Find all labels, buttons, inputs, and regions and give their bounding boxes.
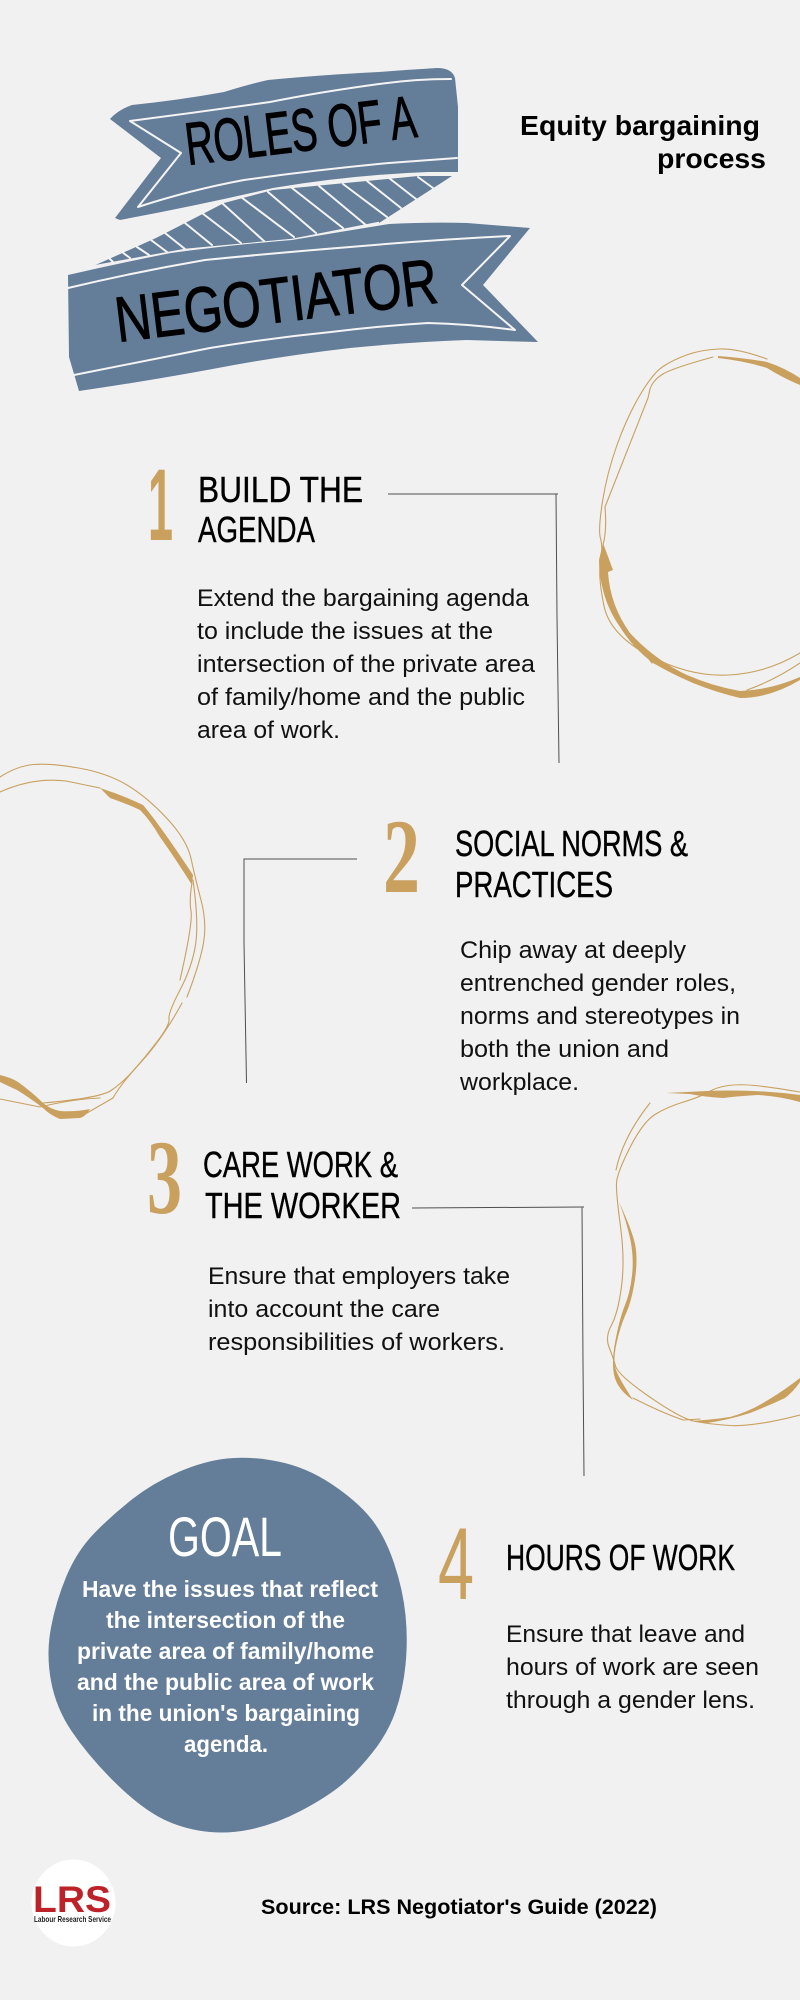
heading 2: SOCIAL NORMS &: [455, 823, 688, 864]
body text 2: entrenched gender roles,: [460, 970, 736, 997]
banner ribbon top: [110, 68, 458, 220]
number 4: 4: [438, 1507, 474, 1621]
heading 3: CARE WORK &: [203, 1144, 398, 1185]
section 1: build the agenda: [148, 448, 536, 744]
body text 4: through a gender lens.: [506, 1687, 755, 1714]
goal text: the intersection of the: [106, 1607, 345, 1633]
banner ribbon bottom: [68, 223, 538, 391]
heading 1: AGENDA: [198, 509, 315, 550]
number 3: 3: [147, 1119, 182, 1236]
logo: LRS: Labour Research Service: [34, 1914, 111, 1924]
heading 3: [203, 1144, 401, 1226]
heading 1: [198, 469, 363, 550]
body text 3: responsibilities of workers.: [208, 1329, 505, 1356]
goal text: [77, 1576, 378, 1757]
body text 2: Chip away at deeply: [460, 937, 686, 964]
body text 4: hours of work are seen: [506, 1654, 759, 1681]
banner ribbon hatch fold: [91, 176, 452, 267]
title banner: [68, 68, 538, 391]
goal heading: GOAL: [168, 1505, 282, 1568]
body text 2: both the union and: [460, 1036, 669, 1063]
logo: LRS: LRS: [33, 1879, 111, 1920]
connector line 2: [244, 859, 357, 1083]
body text 3: [208, 1263, 510, 1356]
body text 2: [459, 937, 740, 1096]
body text 1: [197, 585, 536, 744]
heading 3: THE WORKER: [205, 1185, 401, 1226]
body text 1: area of work.: [197, 717, 340, 744]
body text 1: to include the issues at the: [197, 618, 493, 645]
body text 3: Ensure that employers take: [208, 1263, 510, 1290]
goal text: in the union's bargaining: [92, 1700, 360, 1726]
decorative ring right top: [599, 349, 800, 698]
title line: NEGOTIATOR: NEGOTIATOR: [111, 245, 441, 356]
panel: goal blob: [48, 1458, 407, 1833]
subtitle: [520, 110, 766, 174]
body text 2: norms and stereotypes in: [460, 1003, 740, 1030]
subtitle: process: [657, 143, 766, 174]
source line: Source: LRS Negotiator's Guide (2022): [261, 1896, 657, 1919]
body text 4: Ensure that leave and: [506, 1621, 745, 1648]
body text 3: into account the care: [208, 1296, 440, 1323]
logo: LRS: [32, 1860, 116, 1946]
section 4: hours of work: [438, 1507, 759, 1714]
decorative ring left: [0, 764, 205, 1119]
body text 1: Extend the bargaining agenda: [197, 585, 530, 612]
number 2: 2: [383, 798, 420, 915]
goal text: and the public area of work: [77, 1669, 374, 1695]
connector line 3: [412, 1207, 584, 1476]
connector line 1: [388, 494, 559, 763]
subtitle: Equity bargaining: [520, 110, 760, 141]
decorative ring right bottom: [607, 1085, 800, 1426]
blob shape: [48, 1458, 407, 1833]
goal text: agenda.: [184, 1731, 268, 1757]
heading 1: BUILD THE: [198, 469, 363, 510]
heading 2: [455, 823, 688, 905]
heading 2: PRACTICES: [455, 864, 613, 905]
title line: ROLES OF A: ROLES OF A: [181, 83, 420, 178]
goal text: private area of family/home: [77, 1638, 374, 1664]
body text 1: intersection of the private area: [197, 651, 536, 678]
section 3: care work and the worker: [147, 1119, 510, 1356]
section 2: social norms and practices: [383, 798, 740, 1096]
body text 2: workplace.: [459, 1069, 579, 1096]
section 1: build the agenda: 1: [148, 448, 173, 562]
goal text: Have the issues that reflect: [82, 1576, 378, 1602]
body text 1: of family/home and the public: [197, 684, 525, 711]
body text 4: [506, 1621, 759, 1714]
